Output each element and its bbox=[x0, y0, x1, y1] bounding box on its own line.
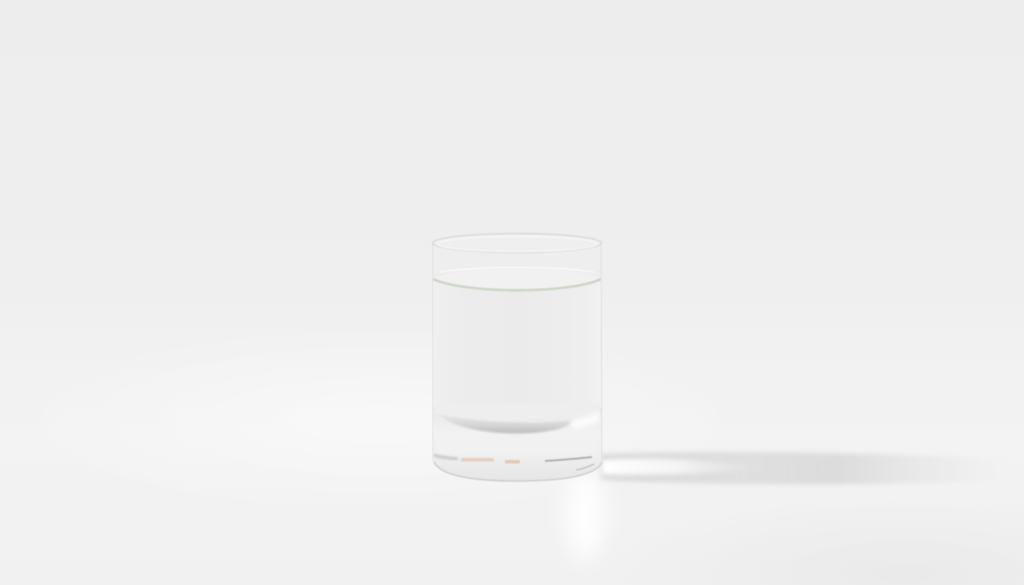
glass upper wall bbox=[432, 242, 602, 280]
base reflections bbox=[434, 455, 594, 470]
water body bbox=[432, 280, 602, 425]
glass base bbox=[433, 404, 602, 481]
glass of water bbox=[432, 234, 602, 481]
light reflection below glass bbox=[565, 470, 605, 560]
side walls bbox=[432, 242, 434, 462]
water surface bbox=[433, 268, 601, 291]
glass rim bbox=[432, 234, 602, 252]
cast shadow to the right bbox=[600, 452, 1015, 484]
